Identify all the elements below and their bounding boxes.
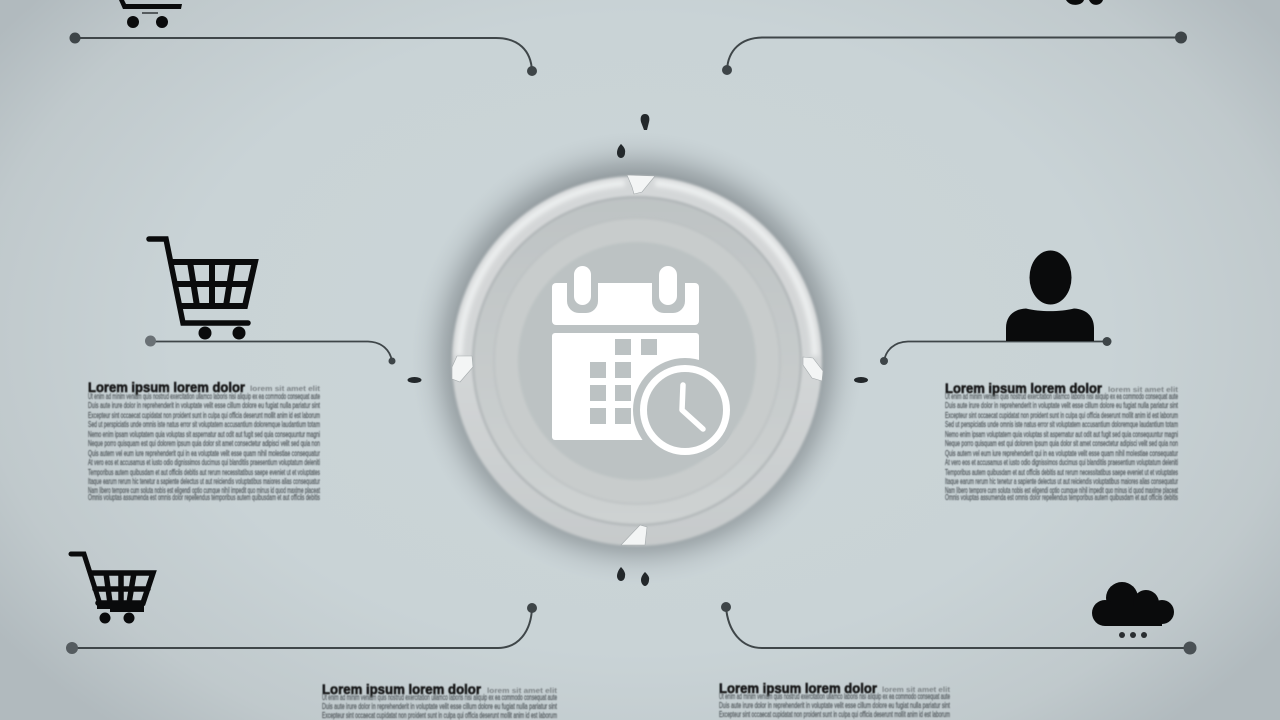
body copy: Ut enim ad minim veniam quis nostrud exercitation ullamco laboris nisi aliquip ex ea commodo consequat aute	[322, 692, 557, 702]
icon: shopping cart middle left	[149, 239, 255, 340]
body copy: At vero eos et accusamus et iusto odio dignissimos ducimus qui blanditiis praesentium voluptatum deleniti	[88, 457, 320, 467]
body copy: Duis aute irure dolor in reprehenderit in voluptate velit esse cillum dolore eu fugiat nulla pariatur sint	[719, 700, 950, 710]
heading: Lorem ipsum lorem dolor	[945, 381, 1103, 396]
heading: Lorem ipsum lorem dolor	[88, 380, 246, 395]
icon: shopping cart bottom left	[71, 554, 153, 624]
heading: Lorem ipsum lorem dolor	[719, 681, 878, 696]
body copy: Temporibus autem quibusdam et aut officiis debitis aut rerum necessitatibus saepe eveniet ut et voluptates	[88, 467, 320, 477]
outer ring band	[452, 176, 822, 546]
white highlight arcs on outer ring	[459, 183, 815, 356]
heading: Lorem ipsum lorem dolor	[322, 682, 482, 697]
body copy: Omnis voluptas assumenda est omnis dolor repellendus temporibus autem quibusdam et aut officiis debitis	[88, 492, 320, 502]
body copy	[322, 688, 558, 720]
inner disc	[518, 242, 756, 480]
body copy: Duis aute irure dolor in reprehenderit in voluptate velit esse cillum dolore eu fugiat nulla pariatur sint	[88, 400, 320, 410]
second ring band	[473, 197, 801, 525]
body copy: lorem sit amet elit	[882, 687, 951, 694]
droplet markers	[408, 114, 868, 586]
body copy: Quis autem vel eum iure reprehenderit qui in ea voluptate velit esse quam nihil molestiae consequatur	[88, 448, 320, 458]
connector: top right	[722, 32, 1187, 75]
ring arrow: top	[627, 175, 655, 194]
third ring band	[494, 218, 780, 504]
body copy: Neque porro quisquam est qui dolorem ipsum quia dolor sit amet consectetur adipisci velit sed quia non	[88, 438, 320, 448]
body copy: Nam libero tempore cum soluta nobis est eligendi optio cumque nihil impedit quo minus id quod maxime placeat	[88, 485, 320, 495]
icon: rain cloud	[1092, 582, 1174, 638]
body copy	[719, 687, 951, 719]
body copy: Excepteur sint occaecat cupidatat non proident sunt in culpa qui officia deserunt mollit anim id est laborum	[88, 410, 320, 420]
body copy: Excepteur sint occaecat cupidatat non proident sunt in culpa qui officia deserunt mollit anim id est laborum	[322, 710, 557, 720]
body copy	[945, 387, 1179, 502]
clock cutout	[633, 358, 737, 462]
calendar binding ring right	[652, 275, 685, 313]
calendar header	[552, 283, 699, 325]
body copy: Itaque earum rerum hic tenetur a sapiente delectus ut aut reiciendis voluptatibus maiores alias consequatur	[88, 476, 320, 486]
body copy: Nemo enim ipsam voluptatem quia voluptas sit aspernatur aut odit aut fugit sed quia consequuntur magni	[88, 429, 320, 439]
binding peg left	[574, 266, 591, 305]
ring arrow: bottom	[621, 525, 647, 545]
ring arrow: right	[803, 357, 823, 381]
connector: bottom right	[721, 602, 1196, 654]
connector: middle left	[145, 336, 396, 364]
badge shadow halo	[411, 132, 863, 584]
body copy: Ut enim ad minim veniam quis nostrud exercitation ullamco laboris nisi aliquip ex ea commodo consequat aute	[88, 391, 320, 401]
icon: calendar with clock	[552, 266, 737, 462]
body copy: Duis aute irure dolor in reprehenderit in voluptate velit esse cillum dolore eu fugiat nulla pariatur sint	[322, 701, 557, 711]
text block: middle right	[945, 381, 1179, 502]
central circular badge	[411, 132, 863, 584]
binding peg right	[659, 266, 677, 305]
body copy: lorem sit amet elit	[250, 386, 321, 393]
icon: cropped shape top right	[1066, 0, 1103, 5]
body copy: Ut enim ad minim veniam quis nostrud exercitation ullamco laboris nisi aliquip ex ea commodo consequat aute	[719, 691, 950, 701]
text block: bottom left	[322, 682, 558, 720]
text block: middle left	[88, 380, 321, 502]
clock face	[644, 368, 726, 452]
clock hands	[682, 385, 703, 429]
calendar body	[552, 333, 699, 440]
ring arrow: left	[452, 356, 473, 382]
body copy: Sed ut perspiciatis unde omnis iste natus error sit voluptatem accusantium doloremque laudantium totam	[88, 419, 320, 429]
body copy	[88, 386, 321, 502]
connector: middle right	[880, 337, 1112, 365]
icon: person	[1006, 250, 1094, 341]
connector: top left	[70, 32, 537, 76]
text block: bottom right	[719, 681, 951, 719]
icon: cropped cart top left	[119, 0, 182, 28]
calendar binding ring left	[567, 275, 598, 313]
body copy: Excepteur sint occaecat cupidatat non proident sunt in culpa qui officia deserunt mollit anim id est laborum	[719, 709, 950, 719]
calendar day grid	[590, 339, 657, 424]
body copy: lorem sit amet elit	[487, 688, 558, 695]
connector: bottom left	[66, 603, 537, 654]
body copy: lorem sit amet elit	[1108, 387, 1179, 394]
